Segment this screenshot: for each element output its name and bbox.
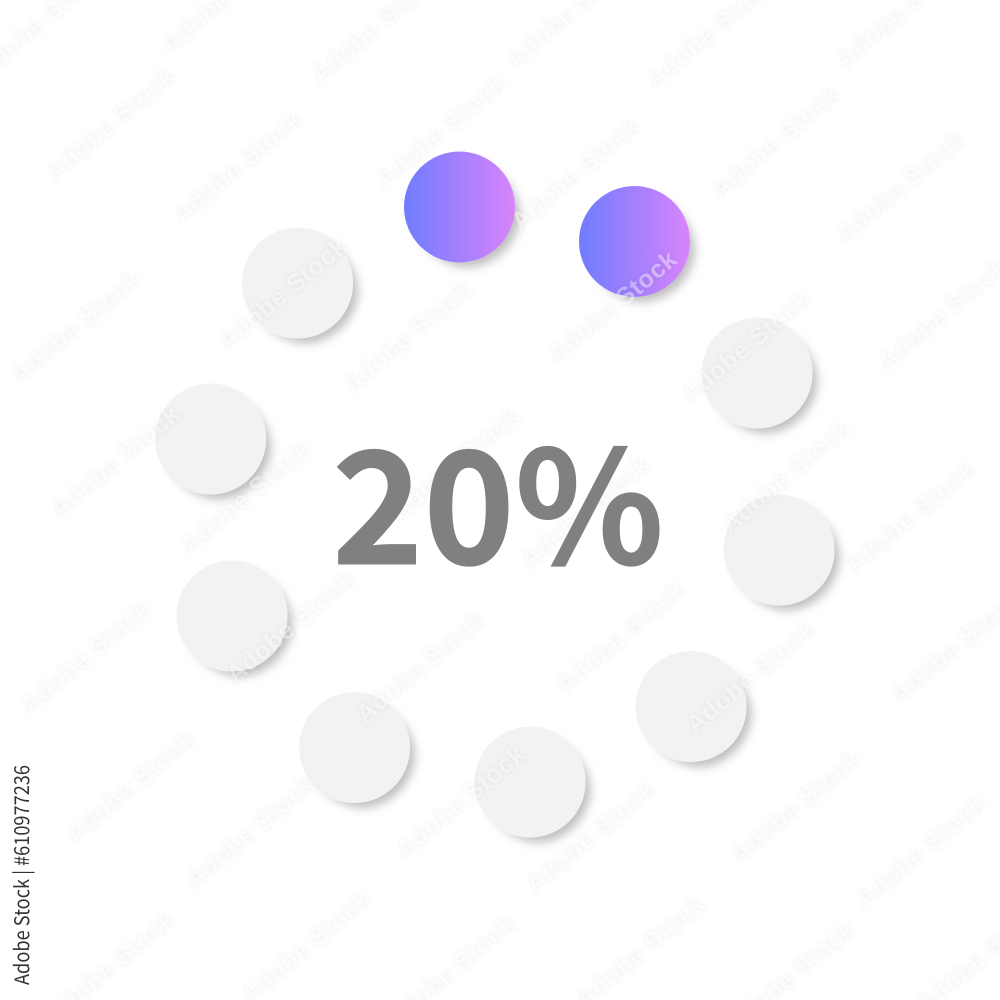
watermark pattern: Adobe Stock xyxy=(726,745,866,869)
watermark pattern: Adobe Stock xyxy=(41,62,181,186)
watermark pattern: Adobe Stock xyxy=(551,575,691,699)
watermark pattern: Adobe Stock xyxy=(16,595,156,719)
inactive dot 8 xyxy=(176,560,288,672)
watermark pattern: Adobe Stock xyxy=(176,435,316,559)
inactive dot 10 xyxy=(242,228,353,338)
watermark pattern: Adobe Stock xyxy=(841,455,981,579)
watermark pattern: Adobe Stock xyxy=(61,725,201,849)
watermark pattern: Adobe Stock xyxy=(391,740,531,864)
watermark pattern: Adobe Stock xyxy=(213,232,353,356)
watermark pattern: Adobe Stock xyxy=(6,265,146,389)
watermark pattern: Adobe Stock xyxy=(371,70,511,194)
inactive dot 7 xyxy=(299,692,410,803)
inactive dot 9 xyxy=(155,384,266,494)
watermark pattern: Adobe Stock xyxy=(851,790,991,914)
watermark pattern: Adobe Stock xyxy=(831,125,971,249)
inactive dot 6 xyxy=(474,726,586,838)
watermark pattern: Adobe Stock xyxy=(181,770,321,894)
watermark pattern: Adobe Stock xyxy=(676,285,816,409)
watermark pattern: Adobe Stock xyxy=(521,775,661,899)
watermark pattern: Adobe Stock xyxy=(46,400,186,524)
stock image id: Adobe Stock | #610977236 xyxy=(6,765,35,985)
watermark pattern: Adobe Stock xyxy=(168,105,308,229)
watermark pattern: Adobe Stock xyxy=(386,402,526,526)
watermark pattern: Adobe Stock xyxy=(543,245,683,369)
watermark pattern: Adobe Stock xyxy=(706,80,846,204)
watermark pattern: Adobe Stock xyxy=(338,275,478,399)
watermark pattern: Adobe Stock xyxy=(681,615,821,739)
watermark pattern: Adobe Stock xyxy=(506,112,646,236)
watermark pattern: Adobe Stock xyxy=(716,415,856,539)
percentage label: 20% xyxy=(332,383,664,609)
inactive dot 3 xyxy=(702,318,812,428)
watermark pattern: Adobe Stock xyxy=(516,450,656,574)
watermark pattern: Adobe Stock xyxy=(351,605,491,729)
active progress dot 1 xyxy=(404,152,515,262)
active progress dot 2 xyxy=(579,186,690,297)
inactive dot 5 xyxy=(636,651,746,762)
inactive dot 4 xyxy=(724,494,834,606)
watermark pattern: Adobe Stock xyxy=(221,565,361,689)
